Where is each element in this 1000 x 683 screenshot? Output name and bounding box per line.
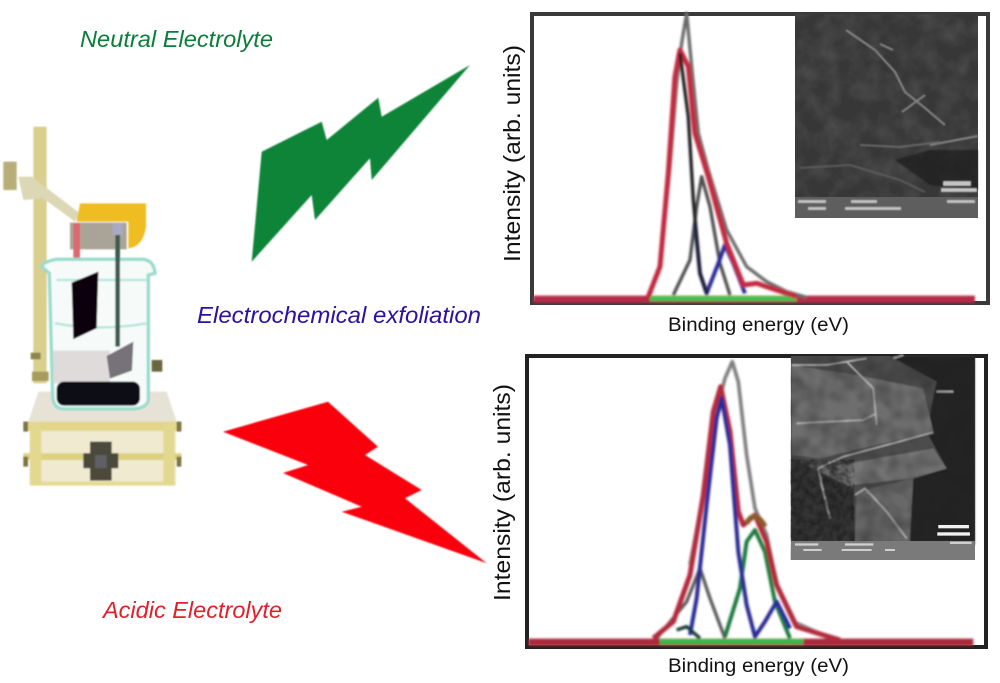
spectrum curves (533, 13, 975, 299)
heading: neutral electrolyte: Neutral Electrolyte (80, 26, 273, 52)
light platform block (53, 351, 110, 383)
corner screws (23, 422, 181, 467)
blue component (690, 398, 790, 637)
plot area and frame (532, 14, 988, 303)
electrochemical cell apparatus (3, 127, 182, 486)
y axis label: Intensity (arb. units) (489, 384, 515, 601)
hot plate top (28, 392, 177, 422)
wire terminal (113, 223, 123, 235)
clamp knob (3, 162, 17, 190)
component peak left (657, 568, 725, 638)
red fit (648, 50, 797, 297)
panel: acidic electrolyte spectrum (489, 355, 986, 677)
dark left foot (677, 627, 700, 638)
gray electrode cap (70, 223, 127, 249)
y axis label: Intensity (arb. units) (499, 45, 525, 262)
base stripes (23, 422, 182, 431)
component peak 3 (695, 223, 745, 293)
base legs (30, 422, 41, 485)
red wire (73, 223, 80, 280)
arrow: green lightning bolt (252, 65, 470, 262)
green background line (660, 634, 803, 650)
component peak 2 (673, 177, 730, 295)
gray electrode (107, 342, 133, 379)
heading: electrochemical exfoliation: Electrochemical exfoliation (197, 302, 481, 328)
spectrum curves (528, 362, 973, 642)
inset: SEM micrograph (acidic) (791, 355, 975, 560)
inset: SEM micrograph (neutral) (795, 14, 978, 218)
heading: acidic electrolyte: Acidic Electrolyte (101, 597, 282, 623)
component peak green (725, 530, 790, 638)
red fit (653, 387, 840, 640)
dark wire (115, 227, 120, 347)
control knob (83, 442, 118, 481)
beaker (42, 259, 155, 409)
side clip (152, 360, 162, 372)
stand joints (31, 353, 41, 359)
black main component (680, 53, 707, 293)
stand rod (33, 127, 47, 383)
green background line (650, 291, 797, 307)
yellow clamp holder (77, 203, 146, 248)
shoulder peak top (747, 517, 765, 527)
panel: neutral electrolyte spectrum (499, 13, 988, 336)
arrow: red lightning bolt (223, 402, 487, 563)
hot plate base (29, 422, 176, 485)
black electrode (72, 272, 98, 339)
baseline (528, 631, 973, 653)
beaker liquid line (55, 280, 147, 327)
knob centre (95, 455, 107, 468)
stirrer pellet (57, 382, 140, 406)
gray envelope (648, 13, 807, 297)
gray envelope (690, 362, 840, 640)
clamp arm (18, 177, 80, 222)
x axis label: Binding energy (eV) (668, 656, 849, 677)
plot area and frame (527, 356, 986, 647)
x axis label: Binding energy (eV) (668, 315, 849, 336)
baseline (533, 288, 975, 310)
